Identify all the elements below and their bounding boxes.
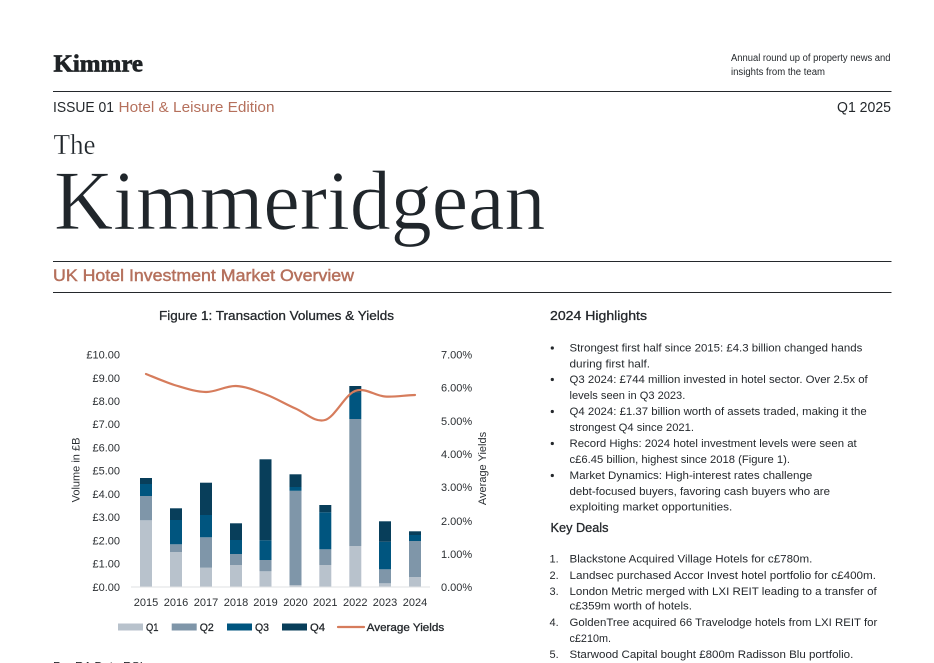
- highlights bullet list: [551, 342, 869, 514]
- year labels: 2016: [164, 597, 188, 609]
- year labels: 2017: [194, 597, 218, 609]
- legend: Q1: [146, 622, 158, 634]
- right axis: yields: 5.00%: [441, 416, 472, 428]
- highlights bullet list: Strongest first half since 2015: £4.3 billion changed hands: [570, 342, 863, 354]
- right axis: yields: 2.00%: [441, 516, 472, 528]
- highlights bullet list: Q3 2024: £744 million invested in hotel sector. Over 2.5x of: [570, 374, 869, 386]
- chart title: Figure 1: Transaction Volumes & Yields: [159, 308, 395, 323]
- key deals numbered list: c£210m.: [570, 633, 611, 645]
- right axis: yields: 6.00%: [441, 383, 472, 395]
- legend: Average Yields: [367, 622, 445, 634]
- key deals numbered list: London Metric merged with LXI REIT leading to a transfer of: [570, 586, 878, 598]
- right axis: yields: [441, 350, 472, 594]
- highlights bullet list: during first half.: [570, 358, 650, 370]
- year labels: 2018: [224, 597, 248, 609]
- key deals numbered list: 2.: [550, 570, 559, 582]
- left axis: volume: £3.00: [92, 512, 120, 524]
- stacked bars: [140, 386, 421, 587]
- year labels: 2021: [313, 597, 338, 609]
- masthead header: [53, 52, 892, 116]
- section heading: UK Hotel Investment Market Overview: [53, 266, 355, 285]
- key deals numbered list: GoldenTree acquired 66 Travelodge hotels from LXI REIT for: [570, 617, 878, 629]
- panel: key deals: [550, 520, 878, 661]
- highlights bullet list: debt-focused buyers, favoring cash buyers who are: [570, 486, 830, 498]
- key deals heading: Key Deals: [550, 520, 609, 535]
- key deals numbered list: 1.: [550, 554, 559, 566]
- year labels: 2019: [253, 597, 278, 609]
- issue date: Q1 2025: [837, 99, 891, 116]
- tagline: Annual round up of property news and: [731, 53, 890, 64]
- panel: 2024 highlights: [550, 308, 869, 514]
- year labels: 2024: [403, 597, 427, 609]
- right axis: yields: 4.00%: [441, 449, 472, 461]
- highlights bullet list: Record Highs: 2024 hotel investment levels were seen at: [570, 438, 857, 450]
- tagline: [731, 53, 890, 78]
- left axis: volume: [86, 350, 120, 594]
- key deals numbered list: c£359m worth of hotels.: [570, 600, 692, 612]
- highlights bullet list: c£6.45 billion, highest since 2018 (Figure 1).: [570, 454, 790, 466]
- left axis: volume: £9.00: [92, 373, 120, 385]
- highlights bullet list: strongest Q4 since 2021.: [570, 422, 694, 434]
- legend: Q2: [200, 622, 214, 634]
- left axis: volume: £5.00: [92, 466, 120, 478]
- highlights bullet list: levels seen in Q3 2023.: [570, 390, 685, 402]
- right axis: yields: 3.00%: [441, 482, 472, 494]
- key deals numbered list: 5.: [550, 649, 559, 661]
- average yields line: [146, 374, 415, 421]
- left axis: volume: £8.00: [92, 396, 120, 408]
- legend: Q3: [255, 622, 269, 634]
- key deals numbered list: Starwood Capital bought £800m Radisson Blu portfolio.: [570, 649, 853, 661]
- edition label: Hotel & Leisure Edition: [118, 99, 274, 116]
- left axis: volume: £0.00: [92, 582, 120, 594]
- highlights bullet list: exploiting market opportunities.: [570, 502, 732, 514]
- key deals numbered list: 3.: [550, 586, 559, 598]
- year labels: 2023: [373, 597, 397, 609]
- tagline: insights from the team: [731, 67, 825, 78]
- key deals numbered list: Landsec purchased Accor Invest hotel portfolio for c£400m.: [570, 570, 876, 582]
- title: Kimmeridgean: [54, 154, 546, 248]
- highlights bullet list: Market Dynamics: High-interest rates challenge: [570, 470, 812, 482]
- year labels: 2020: [283, 597, 308, 609]
- left axis: volume: £2.00: [92, 535, 120, 547]
- left axis: volume: £4.00: [92, 489, 120, 501]
- year labels: 2015: [134, 597, 158, 609]
- issue label: ISSUE 01: [53, 99, 114, 116]
- key deals numbered list: Blackstone Acquired Village Hotels for c£780m.: [570, 554, 812, 566]
- left axis: volume: £6.00: [92, 442, 120, 454]
- highlights bullet list: Q4 2024: £1.37 billion worth of assets traded, making it the: [570, 406, 867, 418]
- legend: Q4: [310, 622, 325, 634]
- left axis title: Volume in £B: [70, 438, 82, 502]
- highlights heading: 2024 Highlights: [550, 308, 648, 323]
- right axis: yields: 7.00%: [441, 350, 472, 362]
- right axis: yields: 1.00%: [441, 549, 472, 561]
- left axis: volume: £10.00: [86, 350, 120, 362]
- year labels: [134, 597, 427, 609]
- legend: [118, 622, 445, 634]
- left axis: volume: £7.00: [92, 419, 120, 431]
- year labels: 2022: [343, 597, 368, 609]
- right axis: yields: 0.00%: [441, 582, 472, 594]
- logo: Kimmre: Kimmre: [54, 52, 143, 78]
- right axis title: Average Yields: [477, 431, 489, 505]
- left axis: volume: £1.00: [92, 558, 120, 570]
- key deals numbered list: [550, 554, 878, 661]
- title: The: [54, 129, 96, 161]
- panel: figure 1 chart: [70, 308, 489, 634]
- key deals numbered list: 4.: [550, 617, 559, 629]
